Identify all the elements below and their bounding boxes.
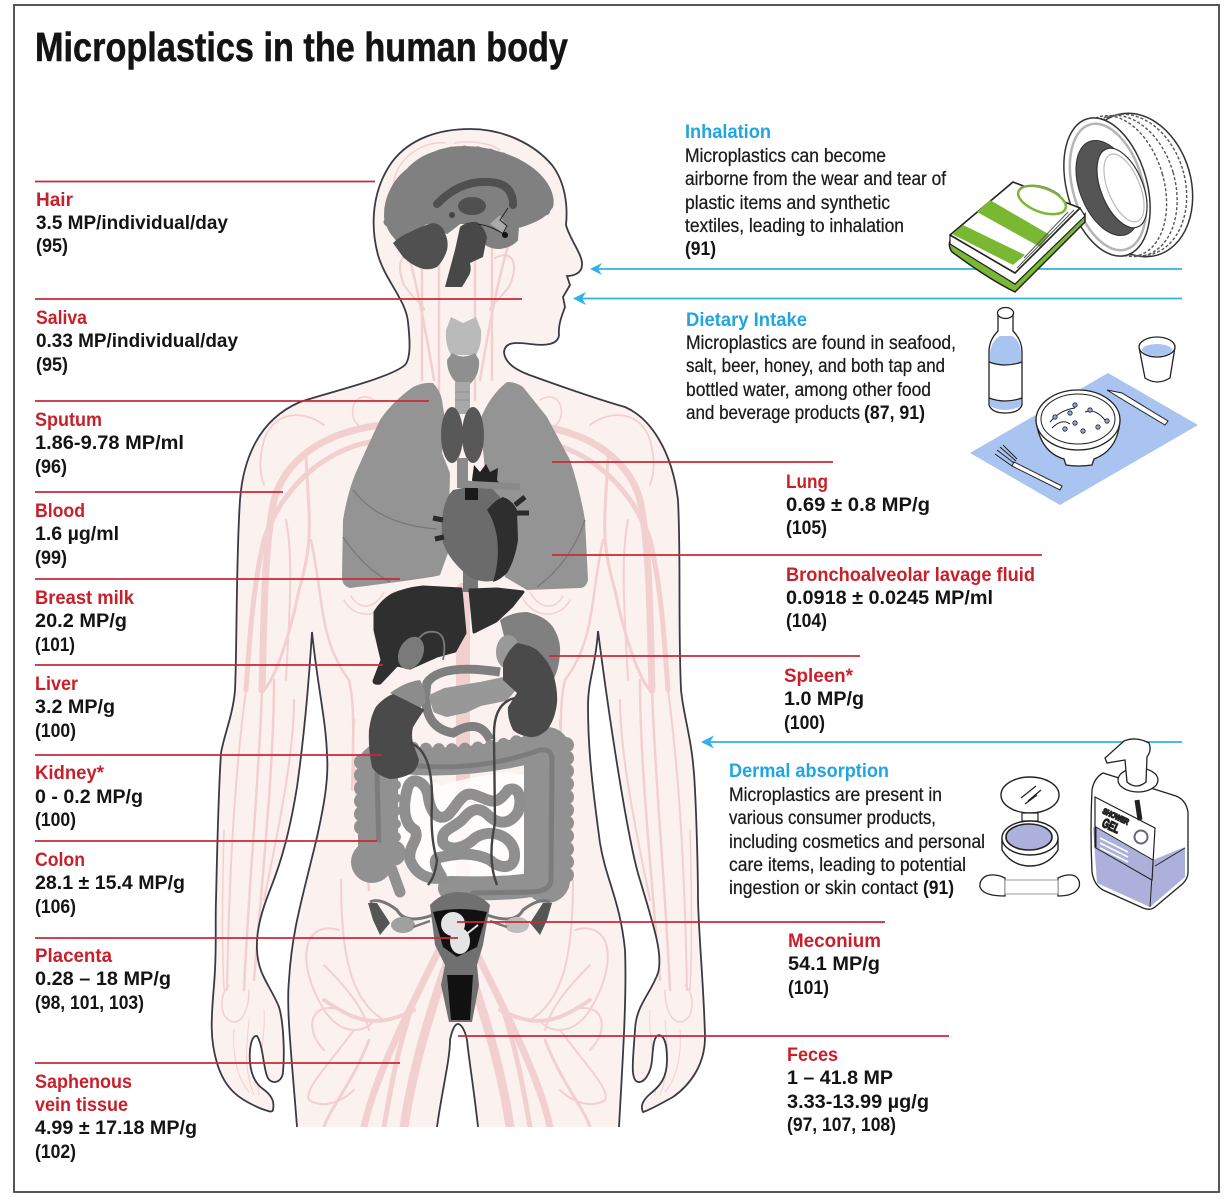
leader line: breast milk — [35, 578, 400, 580]
text block: dietary intake: bottled water, among other food — [686, 380, 931, 401]
organ: left lung — [342, 383, 450, 588]
label: saphenous vein tissue: vein tissue — [35, 1095, 128, 1116]
text block: inhalation: Microplastics can become — [685, 146, 886, 167]
text block: dermal absorption: care items, leading to potential — [729, 855, 966, 876]
organ: pancreas — [432, 679, 512, 714]
label: bronchoalveolar lavage fluid: Bronchoalveolar lavage fluid — [786, 565, 1035, 586]
text block: dietary intake: and beverage products — [686, 403, 860, 424]
label: meconium: 54.1 MP/g — [788, 954, 880, 975]
leader line: bronchoalveolar lavage fluid — [552, 554, 1042, 556]
arrow: dermal absorption — [701, 736, 1182, 748]
label: spleen: (100) — [784, 713, 825, 734]
label: lung: 0.69 ± 0.8 MP/g — [786, 495, 930, 516]
illustration: bottle — [989, 308, 1022, 413]
label: placenta — [35, 946, 171, 1014]
label: hair: 3.5 MP/individual/day — [36, 213, 228, 234]
knife — [1107, 390, 1168, 425]
leader line: saliva — [35, 298, 522, 300]
label text: GEL — [1100, 815, 1122, 836]
label: meconium: Meconium — [788, 931, 881, 952]
label: hair — [36, 190, 228, 257]
illustration: makeup compact — [1001, 777, 1059, 866]
label: colon — [35, 850, 185, 918]
text block: inhalation: textiles, leading to inhalation — [685, 216, 904, 237]
label: saphenous vein tissue — [35, 1072, 197, 1163]
text block: inhalation — [685, 122, 947, 260]
text block: inhalation: Inhalation — [685, 122, 771, 143]
leader line: kidney — [35, 754, 382, 756]
text block: dermal absorption: various consumer products, — [729, 808, 936, 829]
label: lung — [786, 472, 930, 539]
label: saliva: 0.33 MP/individual/day — [36, 331, 238, 352]
organ: heart — [433, 458, 529, 592]
organ: left kidney — [370, 695, 423, 778]
illustration: placemat with bowl and cutlery — [970, 373, 1198, 505]
organ: larynx and trachea — [446, 317, 481, 414]
organ: stomach and duodenum — [426, 669, 500, 740]
label: sputum: 1.86-9.78 MP/ml — [35, 433, 184, 454]
text block: dietary intake: (87, 91) — [864, 403, 925, 424]
organ: large intestine — [351, 735, 566, 893]
label: blood: (99) — [35, 548, 67, 569]
organ: fallopian tubes and ovaries — [368, 901, 552, 935]
label: saliva: (95) — [36, 355, 68, 376]
text block: dermal absorption: Microplastics are present in — [729, 785, 942, 806]
label: sputum — [35, 410, 184, 478]
blood vessels — [222, 142, 692, 1127]
leader line: blood — [35, 491, 283, 493]
label: feces: (97, 107, 108) — [787, 1115, 896, 1136]
leader line: hair — [35, 180, 375, 182]
leader line: saphenous vein tissue — [35, 1062, 400, 1064]
label: liver: 3.2 MP/g — [35, 697, 115, 718]
organ: bronchi — [441, 407, 484, 463]
fork — [995, 445, 1062, 490]
label: bronchoalveolar lavage fluid: (104) — [786, 611, 827, 632]
label text — [1100, 807, 1130, 836]
label: liver: Liver — [35, 674, 79, 695]
organ: spleen — [500, 612, 560, 680]
illustration: shower gel bottle — [1091, 739, 1188, 909]
label: colon: Colon — [35, 850, 85, 871]
text block: inhalation: (91) — [685, 239, 716, 260]
organ: right lung — [480, 382, 588, 590]
leader line: colon — [35, 840, 377, 842]
body silhouette fill — [212, 129, 705, 1127]
label: kidney: (100) — [35, 810, 76, 831]
organ: liver — [374, 587, 523, 683]
text block: dermal absorption: (91) — [923, 878, 954, 899]
text block: dermal absorption: Dermal absorption — [729, 761, 889, 782]
human body figure — [212, 129, 705, 1128]
organ: ureters — [410, 698, 515, 885]
label: blood: Blood — [35, 501, 85, 522]
text block: dietary intake: Microplastics are found in seafood, — [686, 333, 956, 354]
label: feces: Feces — [787, 1045, 838, 1066]
label: sputum: (96) — [35, 457, 67, 478]
label: breast milk: Breast milk — [35, 588, 134, 609]
label: lung: (105) — [786, 518, 827, 539]
label: meconium: (101) — [788, 978, 829, 999]
label: meconium — [788, 931, 881, 999]
label: saphenous vein tissue: 4.99 ± 17.18 MP/g — [35, 1118, 197, 1139]
illustration: car tire — [1049, 100, 1209, 270]
label: blood — [35, 501, 119, 569]
label: bronchoalveolar lavage fluid — [786, 565, 1035, 632]
illustration: glass of water — [1139, 337, 1175, 382]
label: breast milk: 20.2 MP/g — [35, 611, 127, 632]
label: feces: 3.33-13.99 µg/g — [787, 1092, 929, 1113]
label: spleen: 1.0 MP/g — [784, 689, 864, 710]
label: saliva: Saliva — [36, 308, 87, 329]
organ: brain — [385, 147, 553, 287]
label: placenta: 0.28 – 18 MP/g — [35, 969, 171, 990]
label: kidney — [35, 763, 143, 831]
label: sputum: Sputum — [35, 410, 102, 431]
organ: uterus with fetus — [430, 892, 490, 1022]
text block: dietary intake: salt, beer, honey, and both tap and — [686, 356, 945, 377]
text block: dietary intake: Dietary Intake — [686, 310, 807, 331]
label: saphenous vein tissue: Saphenous — [35, 1072, 132, 1093]
label: spleen — [784, 666, 864, 734]
label: colon: 28.1 ± 15.4 MP/g — [35, 873, 185, 894]
label: kidney: Kidney* — [35, 763, 105, 784]
text block: inhalation: airborne from the wear and tear of — [685, 169, 947, 190]
leader line: spleen — [549, 655, 860, 657]
label: colon: (106) — [35, 897, 76, 918]
label: spleen: Spleen* — [784, 666, 854, 687]
label: hair: Hair — [36, 190, 74, 211]
label: saphenous vein tissue: (102) — [35, 1142, 76, 1163]
leader line: placenta — [35, 937, 458, 939]
label: placenta: Placenta — [35, 946, 112, 967]
leader line: lung — [552, 461, 833, 463]
label: breast milk: (101) — [35, 635, 75, 656]
label: feces — [787, 1045, 929, 1136]
organ: small intestine — [405, 781, 520, 878]
label text: SHOWER — [1101, 807, 1130, 827]
leader line: meconium — [457, 921, 885, 923]
label: liver: (100) — [35, 721, 76, 742]
text block: dermal absorption — [729, 761, 985, 899]
label: kidney: 0 - 0.2 MP/g — [35, 787, 143, 808]
bowl — [1036, 390, 1120, 466]
label: bronchoalveolar lavage fluid: 0.0918 ± 0.0245 MP/ml — [786, 588, 993, 609]
label: placenta: (98, 101, 103) — [35, 993, 144, 1014]
label: feces: 1 – 41.8 MP — [787, 1068, 893, 1089]
crotch gap — [437, 1024, 478, 1128]
arrow: inhalation — [590, 263, 1182, 275]
organ: right kidney — [503, 643, 557, 737]
illustration: folded t-shirt — [949, 180, 1085, 292]
leader line: liver — [35, 664, 383, 666]
label: hair: (95) — [36, 236, 68, 257]
organ: adrenal glands — [390, 635, 520, 708]
label: saliva — [36, 308, 238, 376]
text block: inhalation: plastic items and synthetic — [685, 193, 890, 214]
label: blood: 1.6 µg/ml — [35, 524, 119, 545]
label: liver — [35, 674, 115, 742]
text block: dermal absorption: including cosmetics and personal — [729, 832, 985, 853]
text block: dermal absorption: ingestion or skin contact — [729, 878, 919, 899]
body outline — [212, 129, 705, 1127]
text block: dietary intake — [686, 310, 956, 424]
illustration: makeup applicator — [980, 875, 1080, 896]
arrow: dietary intake — [573, 292, 1182, 305]
organ: gallbladder — [393, 632, 444, 673]
leader line: sputum — [35, 400, 429, 402]
title: Microplastics in the human body — [35, 24, 568, 70]
leader line: feces — [458, 1035, 949, 1037]
label: breast milk — [35, 588, 134, 656]
label: lung: Lung — [786, 472, 828, 493]
lung fissures — [343, 490, 585, 587]
